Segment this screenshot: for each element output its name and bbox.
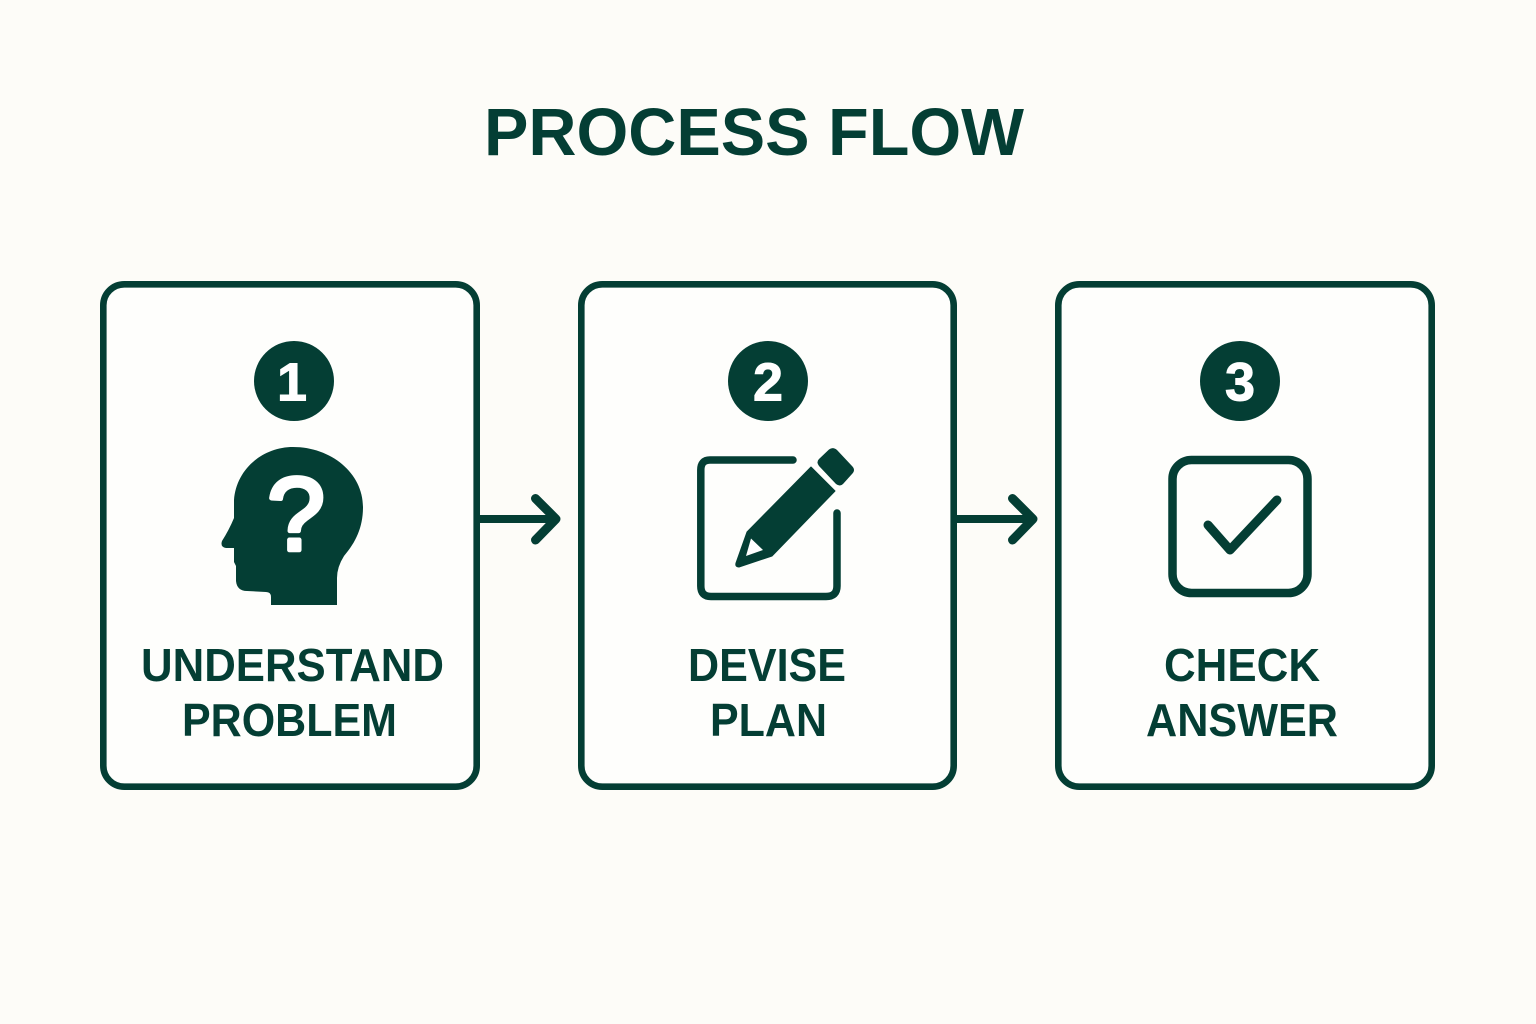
panel: step 1 understand problem — [103, 284, 477, 787]
number badge 2: 2 — [753, 352, 783, 412]
label: understand problem — [141, 639, 444, 746]
icon: pencil on notepad — [701, 448, 854, 596]
label: devise plan: PLAN — [710, 694, 827, 746]
label: check answer: CHECK — [1164, 639, 1320, 691]
title: PROCESS FLOW — [484, 95, 1025, 170]
number badge 3: 3 — [1225, 352, 1255, 412]
label: check answer: ANSWER — [1146, 694, 1338, 746]
label: understand problem: PROBLEM — [182, 694, 397, 746]
label: devise plan: DEVISE — [688, 639, 846, 691]
label: understand problem: UNDERSTAND — [141, 639, 444, 691]
card outline 2 — [581, 284, 954, 787]
arrow: step 2 to step 3 — [957, 498, 1033, 540]
number badge 1: 1 — [277, 352, 307, 412]
card outline 3 — [1058, 284, 1432, 787]
panel: step 3 check answer — [1058, 284, 1432, 787]
arrow: step 1 to step 2 — [480, 498, 556, 540]
card outline 1 — [103, 284, 477, 787]
icon: checkbox with check mark — [1172, 460, 1308, 593]
number badge 1 — [254, 341, 334, 421]
icon: head with question mark — [222, 447, 363, 605]
label: check answer — [1146, 639, 1338, 746]
number badge 2 — [728, 341, 808, 421]
number badge 3 — [1200, 341, 1280, 421]
label: devise plan — [688, 639, 846, 746]
panel: step 2 devise plan — [581, 284, 954, 787]
icon: head with question mark: ? — [267, 457, 325, 573]
